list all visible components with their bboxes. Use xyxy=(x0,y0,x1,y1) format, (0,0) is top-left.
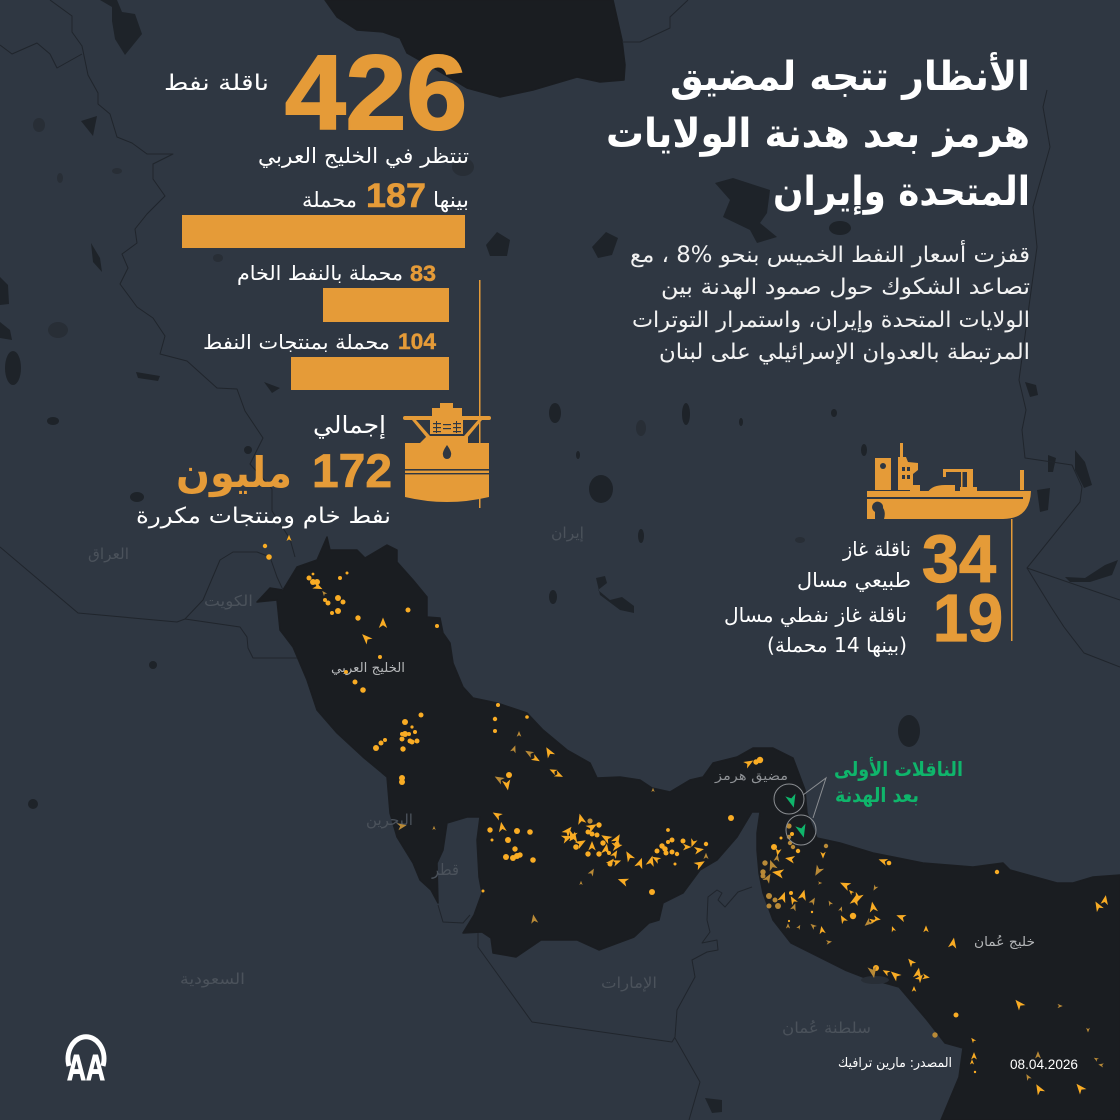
bar: 83 crude oil xyxy=(323,288,449,322)
icon: LNG carrier xyxy=(867,443,1031,519)
map labels: countries: السعودية xyxy=(180,970,245,988)
title: هرمز بعد هدنة الولايات xyxy=(606,111,1030,157)
map labels: waters: خليج عُمان xyxy=(974,934,1035,950)
ship markers: moving arrows xyxy=(286,535,1110,1095)
callout text: بعد الهدنة xyxy=(835,783,919,807)
callout text xyxy=(834,756,963,807)
map labels: countries: الإمارات xyxy=(601,974,657,992)
bar: 187 loaded xyxy=(182,215,465,248)
bracket line xyxy=(479,280,480,508)
bar: 104 oil products xyxy=(291,357,449,390)
callout circles and leader lines xyxy=(774,778,826,845)
intro paragraph: المرتبطة بالعدوان الإسرائيلي على لبنان xyxy=(659,340,1030,365)
title: المتحدة وإيران xyxy=(773,169,1030,215)
stat: 426 oil tankers: 426 xyxy=(285,34,467,152)
map labels: countries: الكويت xyxy=(204,592,253,610)
map labels: countries: العراق xyxy=(88,545,129,563)
map labels: waters xyxy=(331,661,1035,950)
stat: 19 LPG tankers: ناقلة غاز نفطي مسال xyxy=(724,603,907,628)
map labels: countries: قطر xyxy=(431,860,459,880)
callout text: الناقلات الأولى xyxy=(834,756,963,781)
stat: 104 oil products: 104 xyxy=(398,329,437,354)
map labels: waters: مضيق هرمز xyxy=(714,769,788,784)
icon: oil tanker front view xyxy=(403,403,491,502)
map labels: countries: إيران xyxy=(551,524,584,542)
stat: total 172 million: 172 xyxy=(312,444,392,497)
map labels: countries xyxy=(88,524,871,1037)
stat: 34 LNG tankers: ناقلة غاز xyxy=(842,537,911,561)
stat: 187 loaded: بينها xyxy=(433,188,469,212)
stat: 426 oil tankers xyxy=(164,34,469,168)
stat: total 172 million: مليون xyxy=(176,448,292,498)
map labels: waters: الخليج العربي xyxy=(331,661,405,676)
stat: 426 oil tankers: ناقلة نفط xyxy=(164,71,269,96)
map labels: countries: سلطنة عُمان xyxy=(782,1019,871,1037)
map labels: countries: البحرين xyxy=(366,811,413,829)
stat: 19 LPG tankers xyxy=(724,581,1003,657)
intro paragraph xyxy=(630,240,1030,365)
stat: total 172 million: نفط خام ومنتجات مكررة xyxy=(136,504,391,529)
date: 08.04.2026 xyxy=(1010,1056,1078,1072)
stat: 187 loaded: محملة xyxy=(302,188,357,212)
intro paragraph: تصاعد الشكوك حول صمود الهدنة بين xyxy=(661,275,1030,300)
title xyxy=(606,51,1030,215)
stat: 187 loaded: 187 xyxy=(366,177,426,215)
stat: 34 LNG tankers: 34 xyxy=(922,522,996,597)
intro paragraph: الولايات المتحدة وإيران، واستمرار التوترات xyxy=(632,308,1030,333)
stat: 426 oil tankers: تنتظر في الخليج العربي xyxy=(258,144,469,168)
stat: 34 LNG tankers: طبيعي مسال xyxy=(797,568,911,593)
stat: 19 LPG tankers: (بينها 14 محملة) xyxy=(767,633,907,657)
sea: Arabian Gulf and Gulf of Oman xyxy=(257,537,1120,1120)
icon: green ship arrows xyxy=(785,794,809,839)
intro paragraph: قفزت أسعار النفط الخميس بنحو %8 ، مع xyxy=(630,240,1030,268)
stat: 104 oil products: محملة بمنتجات النفط xyxy=(203,330,390,354)
faint terrain patches xyxy=(33,118,889,984)
stat: 83 crude oil: 83 xyxy=(410,261,436,286)
sea: Caspian xyxy=(325,0,625,97)
callout: first tankers after the truce xyxy=(774,756,963,845)
stat: 34 LNG tankers xyxy=(797,522,996,597)
stat: total 172 million xyxy=(136,411,392,529)
stat: 19 LPG tankers: 19 xyxy=(933,581,1003,656)
ship markers: dim arrows xyxy=(321,590,1104,1081)
ship markers: dim dots xyxy=(587,818,938,1038)
stat: total 172 million: إجمالي xyxy=(313,411,386,440)
gas bracket line xyxy=(1011,519,1012,641)
source: المصدر: مارين ترافيك xyxy=(838,1056,952,1071)
title: الأنظار تتجه لمضيق xyxy=(670,51,1030,100)
stat: 83 crude oil: محملة بالنفط الخام xyxy=(237,261,403,285)
stat: 187 loaded xyxy=(302,177,469,215)
ship markers: anchored dots xyxy=(263,544,999,1073)
logo: Anadolu Agency xyxy=(67,1037,105,1088)
logo: Anadolu Agency: AA xyxy=(67,1047,105,1088)
